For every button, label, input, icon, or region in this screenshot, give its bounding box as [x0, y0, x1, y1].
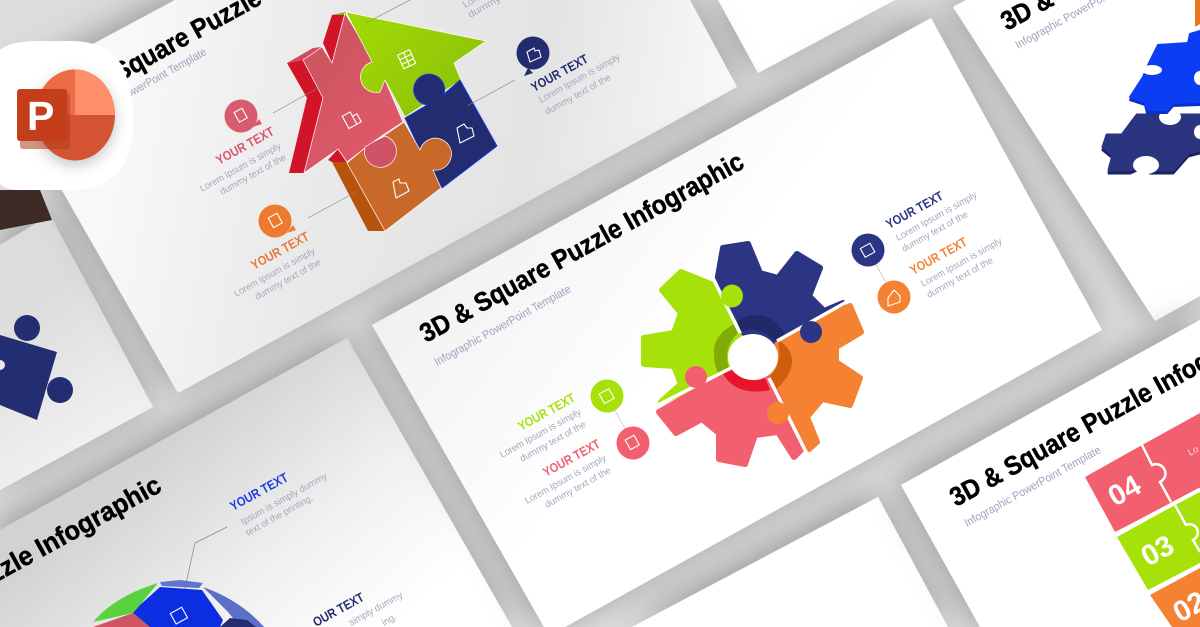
callout: house navy: dummy text of the: [543, 72, 613, 118]
centre slide title: 3D & Square Puzzle Infographic: [414, 146, 749, 348]
orange side face: [332, 162, 385, 231]
panel: centre gear slide: [372, 18, 1102, 627]
panel: left slide: [0, 215, 153, 490]
callout: house red: [198, 87, 320, 198]
sphere puzzle chart: [93, 580, 264, 627]
gear puzzle chart: [644, 244, 861, 464]
callout: house orange: [232, 192, 356, 303]
panel: top-middle slide: [718, 0, 895, 73]
icon: PowerPoint app badge: P: [27, 93, 54, 139]
panel: house puzzle slide: [5, 0, 737, 393]
dark laptop corner: [0, 190, 52, 230]
callout: house green: [366, 0, 503, 23]
gear piece: navy: [717, 244, 843, 342]
panel: bottom-middle slide: [632, 497, 948, 627]
square puzzle chart: 04: [1103, 469, 1147, 513]
callout: sphere navy: [310, 589, 405, 627]
callout: gear navy: YOUR TEXT: [883, 188, 946, 232]
callout: sphere blue: [183, 470, 330, 597]
red top face: [287, 47, 322, 63]
callout: sphere blue: YOUR TEXT: [227, 470, 291, 514]
P square: [17, 89, 67, 141]
red side faces: [287, 12, 347, 173]
dark inner arcs: [714, 315, 792, 392]
centre hole: [728, 334, 778, 380]
panel: bottom-right slide: [901, 320, 1200, 627]
orange piece: [347, 122, 451, 231]
gear piece: pink: [659, 371, 801, 464]
house puzzle chart: [287, 12, 497, 231]
navy puzzle piece on left slide: [0, 315, 73, 420]
step 02: [1150, 568, 1200, 627]
callout: house navy: [467, 36, 622, 118]
callout: sphere blue: text of the printing.: [244, 493, 315, 539]
square puzzle chart: 03: [1136, 529, 1180, 573]
white seams: [654, 276, 850, 456]
callout: gear navy: Lorem Ipsum is simply: [894, 190, 979, 244]
callout: gear pink: dummy text of the: [543, 465, 613, 511]
gear piece: orange: [769, 306, 861, 449]
icon: PowerPoint app badge: [0, 41, 134, 190]
navy piece: [405, 74, 497, 188]
step 03: [1117, 492, 1200, 590]
callout: house red: YOUR TEXT: [213, 124, 277, 168]
callout: gear orange: Lorem Ipsum is simply: [919, 236, 1004, 290]
callout: gear pink: YOUR TEXT: [540, 436, 603, 480]
callout: gear pink: [523, 426, 650, 511]
callout: gear navy: dummy text of the: [900, 209, 970, 255]
green top edge: [332, 12, 346, 15]
callout: gear green: dummy text of the: [518, 419, 588, 465]
red piece: [303, 13, 403, 173]
callout: gear orange: [878, 234, 1004, 314]
callout: gear green: YOUR TEXT: [515, 390, 578, 434]
piece icons: [342, 50, 474, 198]
gear piece: green: [644, 272, 739, 402]
callout: house navy: YOUR TEXT: [528, 51, 591, 95]
knobs: [685, 284, 822, 424]
callout: gear green: [498, 380, 624, 465]
bottom-right slide title: Infographic PowerPoint Template: [963, 444, 1103, 530]
panel: top-right slide: [953, 0, 1200, 321]
callout: house red: Lorem Ipsum is simply: [198, 141, 283, 195]
callout: gear orange: YOUR TEXT: [907, 234, 970, 278]
green piece: [346, 12, 486, 117]
logo disc: [35, 70, 115, 160]
callout: house orange: dummy text of the: [253, 257, 323, 303]
callout: gear green: Lorem Ipsum is simply: [498, 407, 583, 461]
callout: gear navy: [852, 188, 979, 266]
callout: house navy: Lorem Ipsum is simply: [537, 52, 622, 106]
panel: bottom-left slide: [0, 338, 512, 627]
callout: house orange: Lorem Ipsum is simply: [232, 246, 317, 300]
callout: sphere blue: Ipsum is simply dummy: [239, 471, 330, 528]
navy 3D piece: [1103, 109, 1200, 174]
callout: gear connector left: [607, 396, 633, 443]
square puzzle chart: [1085, 413, 1200, 627]
callout: house orange: YOUR TEXT: [248, 229, 312, 273]
step 04: [1085, 413, 1200, 532]
callout: gear orange: dummy text of the: [925, 255, 995, 301]
house slide title: Infographic PowerPoint Template: [72, 46, 209, 130]
callout: gear pink: Lorem Ipsum is simply: [523, 453, 608, 507]
red knob: [364, 136, 396, 167]
blue 3D piece: [1130, 31, 1200, 113]
3D puzzle pieces on top-right slide: [1103, 0, 1200, 174]
callout: gear connector right: [868, 250, 894, 297]
centre slide subtitle: Infographic PowerPoint Template: [433, 283, 573, 369]
callout: house red: dummy text of the: [218, 152, 288, 198]
